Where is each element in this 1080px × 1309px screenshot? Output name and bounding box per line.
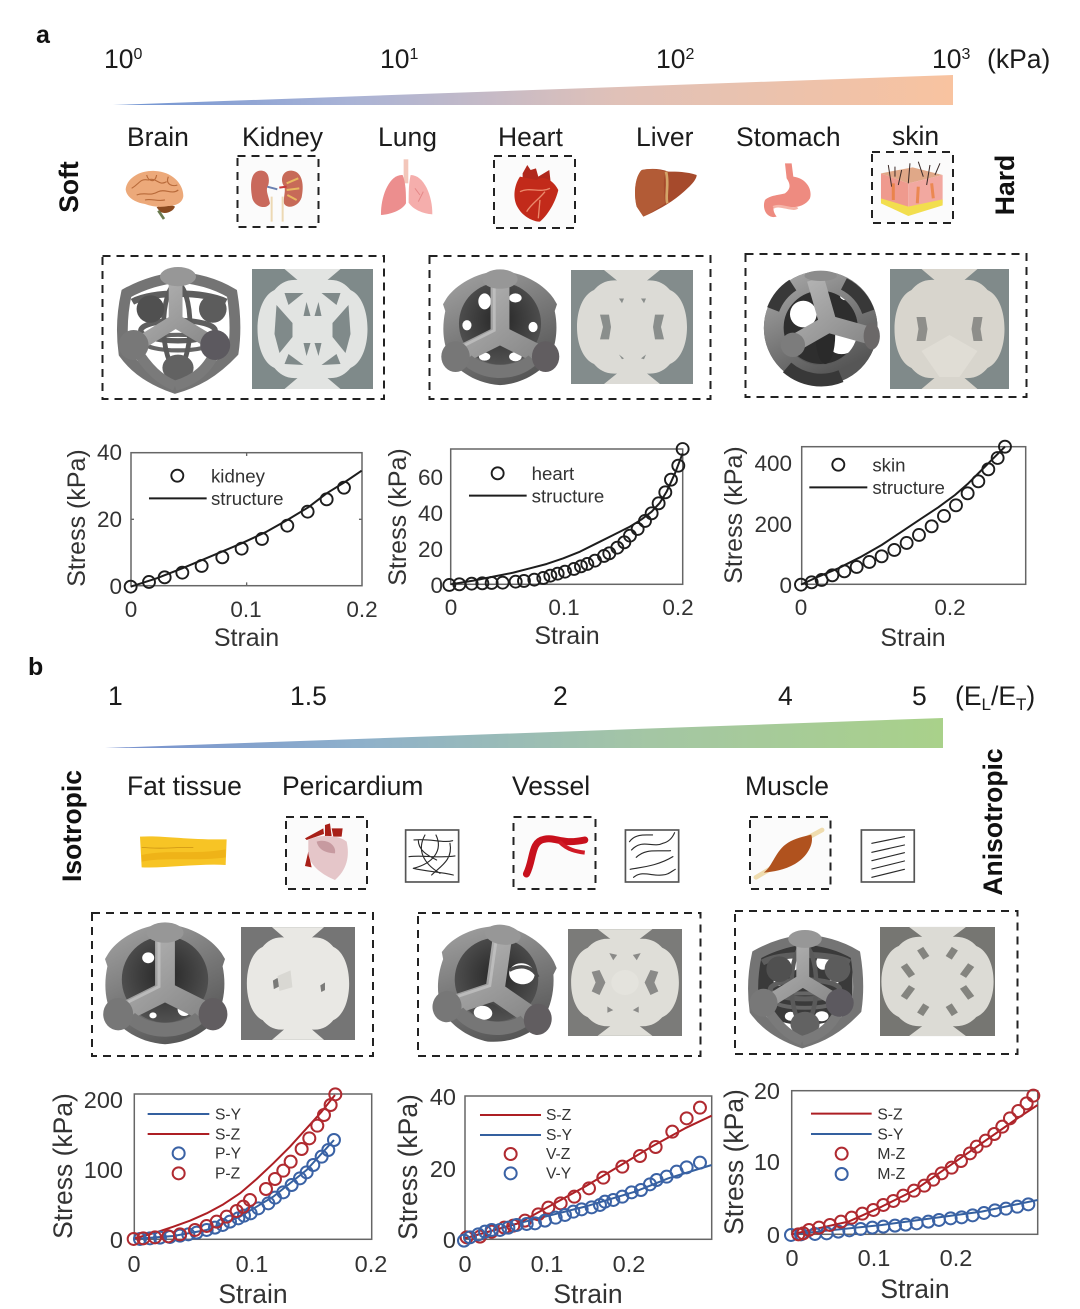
- 3D model: skin lattice: [764, 271, 880, 385]
- y ticks: [84, 1087, 123, 1253]
- dashed frame: [430, 256, 710, 399]
- icon: wavy fibers: [625, 830, 679, 882]
- x ticks: 0.2: [662, 595, 694, 620]
- y ticks: 0: [109, 574, 122, 599]
- data and legend: P-Z: [215, 1165, 241, 1182]
- icon: random fibers: [406, 830, 459, 882]
- tissue names row: Muscle: [745, 771, 829, 801]
- anisotropy scale labels: (E: [955, 681, 982, 711]
- x ticks: [127, 1251, 387, 1277]
- x ticks: 0.1: [236, 1251, 268, 1277]
- x ticks: 0.1: [858, 1245, 890, 1271]
- y axis title: Stress (kPa): [384, 448, 412, 586]
- anisotropic label: Anisotropic: [978, 748, 1008, 896]
- x ticks: 0: [458, 1251, 472, 1277]
- gradient wedge: modulus: [113, 75, 953, 105]
- y ticks: 20: [430, 1156, 456, 1182]
- y axis title: Stress (kPa): [393, 1094, 423, 1240]
- icon: brain: [126, 171, 183, 219]
- organ names row: skin: [892, 121, 939, 151]
- 3D model: kidney lattice: [119, 267, 235, 388]
- anisotropy scale labels: ): [1026, 681, 1035, 711]
- anisotropy scale labels: /E: [991, 681, 1016, 711]
- data and legend: structure: [211, 488, 284, 509]
- icon: liver: [635, 169, 697, 217]
- data and legend: S-Y: [215, 1106, 242, 1123]
- x ticks: 0.2: [940, 1245, 972, 1271]
- data and legend: S-Y: [546, 1127, 573, 1144]
- x ticks: 0: [127, 1251, 141, 1277]
- x ticks: [458, 1251, 645, 1277]
- modulus scale labels: [104, 44, 1050, 74]
- x ticks: 0.1: [230, 597, 262, 622]
- data and legend: [795, 441, 1011, 591]
- x axis title: Strain: [534, 622, 600, 650]
- icon: skin: [881, 162, 943, 216]
- data and legend: S-Z: [546, 1107, 572, 1124]
- anisotropy scale labels: T: [1016, 695, 1026, 714]
- y ticks: 40: [418, 501, 443, 526]
- dashed frame: [746, 254, 1026, 397]
- x axis title: Strain: [880, 624, 946, 652]
- hard label: Hard: [990, 155, 1020, 215]
- y axis title: Stress (kPa): [719, 1089, 749, 1235]
- x ticks: 0.1: [548, 595, 580, 620]
- chart: skin: [720, 441, 1026, 652]
- organ names row: Liver: [636, 122, 694, 152]
- icon: aligned fibers: [861, 830, 914, 882]
- x ticks: 0: [795, 595, 807, 620]
- icon: vessel: [526, 839, 585, 874]
- dashed frame: [418, 913, 700, 1056]
- chart: kidney: [63, 440, 378, 652]
- y ticks: 0: [430, 573, 443, 598]
- icon: pericardium frame: [286, 817, 367, 889]
- y ticks: 20: [97, 507, 122, 532]
- modulus scale labels: 0: [133, 46, 142, 63]
- organ names row: Brain: [127, 122, 189, 152]
- icon: stomach: [764, 163, 811, 217]
- data and legend: structure: [872, 477, 945, 498]
- gradient wedge: anisotropy: [105, 718, 943, 748]
- organ names row: Lung: [378, 122, 437, 152]
- anisotropy scale labels: 4: [778, 681, 793, 711]
- data and legend: [443, 443, 689, 591]
- modulus scale labels: 2: [685, 46, 694, 63]
- x axis title: Strain: [218, 1279, 288, 1309]
- dashed frame: [92, 913, 373, 1056]
- icon: skin frame: [872, 152, 953, 223]
- x ticks: 0: [125, 597, 137, 622]
- y ticks: 0: [779, 573, 792, 598]
- y ticks: 20: [754, 1078, 780, 1104]
- x ticks: [785, 1245, 972, 1271]
- modulus scale labels: 10: [656, 44, 685, 74]
- lattice panel: pericardium: [92, 913, 373, 1056]
- y axis title: Stress (kPa): [720, 446, 748, 584]
- y ticks: 0: [767, 1222, 780, 1248]
- data and legend: kidney: [211, 465, 266, 486]
- anisotropy scale labels: 2: [553, 681, 568, 711]
- y ticks: 10: [754, 1149, 780, 1175]
- data and legend: M-Z: [877, 1166, 906, 1183]
- x ticks: [795, 595, 966, 620]
- x axis title: Strain: [880, 1274, 950, 1304]
- anisotropy scale labels: 1: [108, 681, 123, 711]
- lattice panel: heart: [430, 256, 710, 399]
- dashed frame: [735, 911, 1018, 1054]
- anisotropy scale labels: [108, 681, 1035, 714]
- icon: muscle: [756, 830, 822, 877]
- icon: pericardium heart: [305, 823, 348, 880]
- lattice panel: muscle: [735, 911, 1018, 1054]
- isotropic label: Isotropic: [57, 770, 87, 882]
- icon: muscle frame: [750, 817, 830, 889]
- axes: [802, 447, 1026, 584]
- data and legend: heart: [532, 463, 575, 484]
- 3D model: vessel lattice: [429, 917, 564, 1050]
- organ names row: Heart: [498, 122, 563, 152]
- x ticks: 0.1: [531, 1251, 563, 1277]
- organ names row: Stomach: [736, 122, 841, 152]
- icon: heart: [514, 165, 558, 222]
- x ticks: 0.2: [355, 1251, 387, 1277]
- organ names row: [127, 121, 939, 152]
- data and legend: S-Z: [877, 1106, 903, 1123]
- data and legend: S-Y: [877, 1126, 904, 1143]
- y ticks: [418, 465, 443, 598]
- soft label: Soft: [54, 161, 84, 213]
- x ticks: 0: [445, 595, 457, 620]
- x ticks: [445, 595, 694, 620]
- y ticks: [430, 1084, 456, 1253]
- panel label: a: a: [36, 21, 51, 49]
- icon: fat tissue: [140, 836, 227, 867]
- chart: pericardium: [48, 1087, 387, 1309]
- icon: lungs: [381, 159, 432, 215]
- icon: vessel frame: [514, 817, 596, 889]
- y ticks: [754, 451, 792, 598]
- data and legend: [128, 1088, 341, 1245]
- panel label: b: b: [28, 653, 43, 681]
- organ names row: Kidney: [242, 122, 324, 152]
- icon: heart frame: [494, 156, 575, 228]
- anisotropy scale labels: 1.5: [290, 681, 327, 711]
- y ticks: 100: [84, 1157, 123, 1183]
- y ticks: 200: [754, 512, 792, 537]
- icon: kidney frame: [238, 156, 318, 227]
- data and legend: P-Y: [215, 1145, 242, 1162]
- chart: muscle: [719, 1078, 1039, 1304]
- data and legend: V-Y: [546, 1165, 572, 1182]
- y ticks: 20: [418, 537, 443, 562]
- photo: skin lattice: [890, 269, 1009, 389]
- data and legend: [785, 1090, 1039, 1241]
- y axis title: Stress (kPa): [48, 1093, 78, 1239]
- y ticks: 40: [430, 1084, 456, 1110]
- photo: vessel lattice: [568, 929, 682, 1036]
- y ticks: 200: [84, 1087, 123, 1113]
- tissue names row: Fat tissue: [127, 771, 242, 801]
- axes: [134, 1094, 372, 1239]
- photo: heart lattice: [571, 270, 693, 384]
- lattice panel: skin: [746, 254, 1026, 397]
- y ticks: 60: [418, 465, 443, 490]
- anisotropy scale labels: 5: [912, 681, 927, 711]
- y ticks: 0: [443, 1227, 456, 1253]
- modulus scale labels: 10: [380, 44, 409, 74]
- x ticks: 0.2: [613, 1251, 645, 1277]
- x ticks: 0.2: [934, 595, 966, 620]
- data and legend: V-Z: [546, 1146, 571, 1163]
- modulus scale labels: 1: [409, 46, 418, 63]
- data and legend: structure: [532, 485, 604, 506]
- tissue names row: [127, 771, 829, 801]
- x ticks: 0: [785, 1245, 799, 1271]
- chart: vessel: [393, 1084, 712, 1309]
- y ticks: [754, 1078, 780, 1248]
- x axis title: Strain: [214, 624, 279, 652]
- data and legend: S-Z: [215, 1126, 241, 1143]
- axes: [131, 453, 362, 586]
- axes: [792, 1091, 1038, 1234]
- 3D model: heart lattice: [441, 269, 559, 385]
- modulus scale labels: (kPa): [987, 44, 1050, 74]
- data and legend: [458, 1102, 712, 1247]
- y axis title: Stress (kPa): [63, 449, 91, 587]
- axes: [451, 449, 683, 584]
- icon: kidneys: [251, 171, 303, 222]
- 3D model: muscle lattice: [750, 930, 858, 1043]
- anisotropy scale labels: L: [982, 695, 991, 714]
- dashed frame: [102, 256, 384, 399]
- axes: [465, 1096, 712, 1239]
- y ticks: 40: [97, 440, 122, 465]
- photo: muscle lattice: [880, 927, 995, 1036]
- tissue names row: Vessel: [512, 771, 590, 801]
- y ticks: 0: [110, 1227, 123, 1253]
- tissue names row: Pericardium: [282, 771, 423, 801]
- photo: pericardium lattice: [241, 927, 355, 1040]
- lattice panel: vessel: [418, 913, 700, 1056]
- photo: kidney lattice: [252, 269, 373, 389]
- lattice panel: kidney: [102, 256, 384, 399]
- data and legend: [125, 453, 362, 593]
- modulus scale labels: 10: [932, 44, 961, 74]
- chart: heart: [384, 443, 694, 650]
- x ticks: [125, 597, 378, 622]
- x axis title: Strain: [553, 1279, 623, 1309]
- modulus scale labels: 10: [104, 44, 133, 74]
- data and legend: M-Z: [877, 1146, 906, 1163]
- 3D model: pericardium lattice: [103, 922, 227, 1044]
- x ticks: 0.2: [346, 597, 378, 622]
- data and legend: skin: [872, 454, 906, 475]
- y ticks: [97, 440, 122, 599]
- modulus scale labels: 3: [961, 46, 970, 63]
- y ticks: 400: [754, 451, 792, 476]
